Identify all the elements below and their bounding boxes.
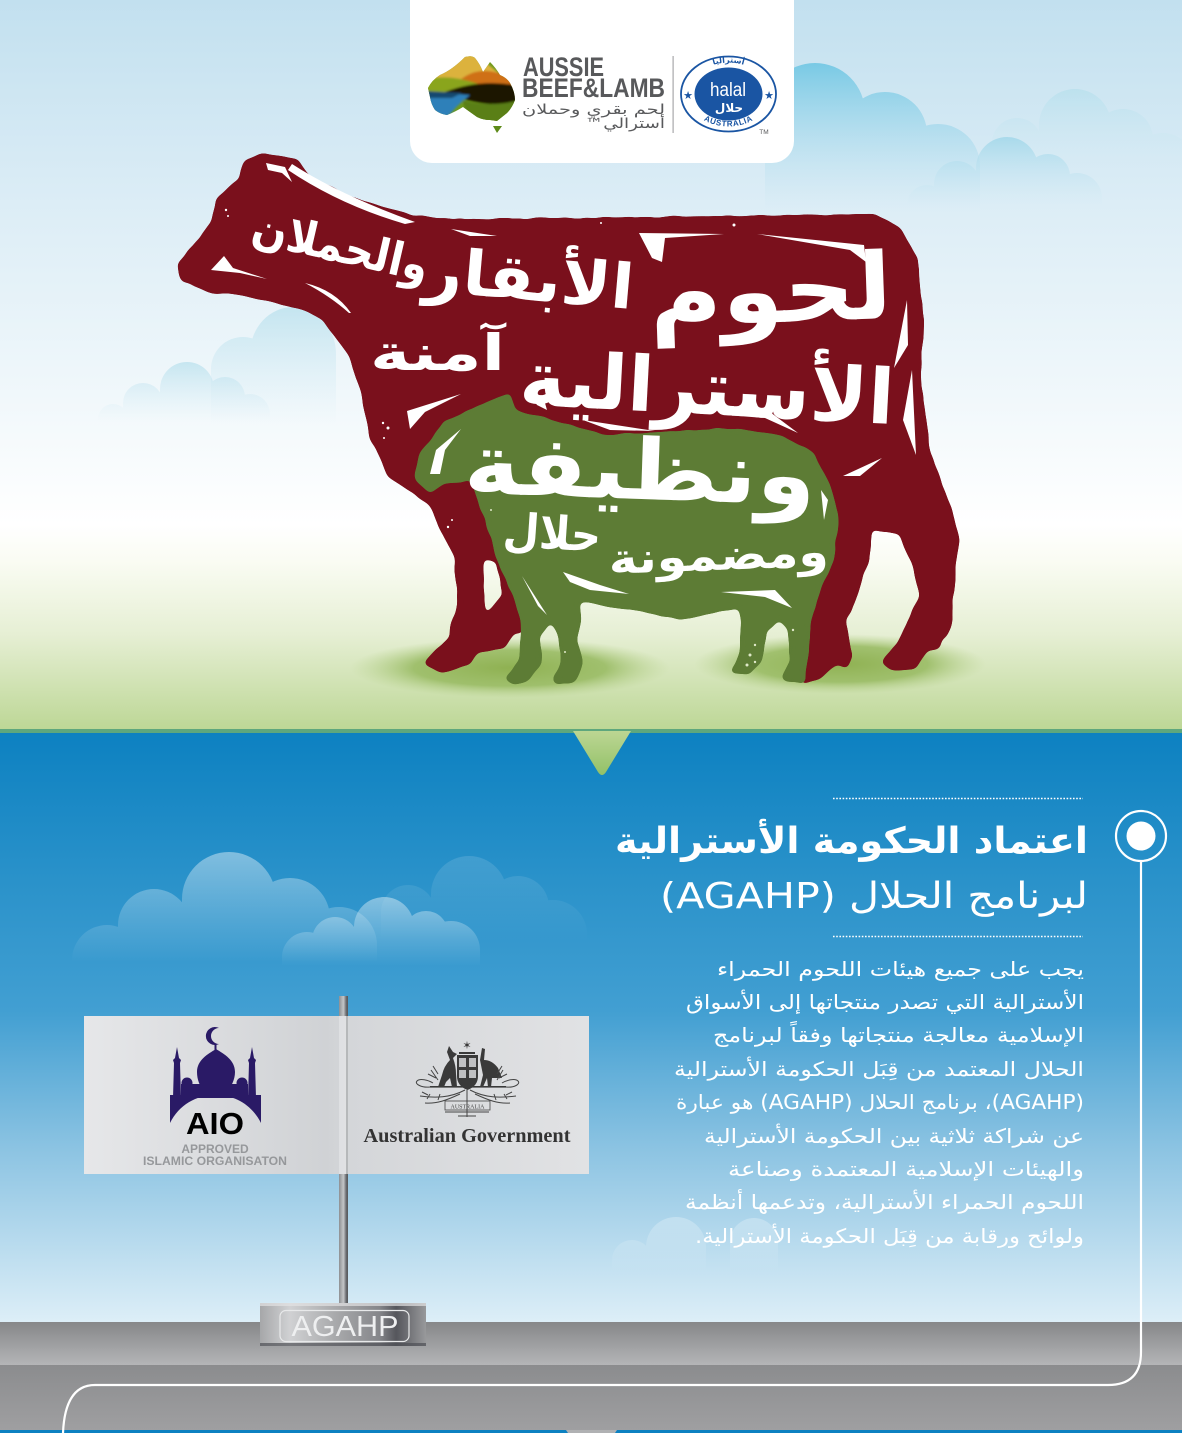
logo: halal Australia seal: ★ [683, 90, 693, 102]
sky and meadow background [0, 0, 1182, 729]
AIO logo: APPROVED [181, 1142, 249, 1156]
pole base with AGAHP plate: AGAHP [292, 1311, 398, 1343]
logo: halal Australia seal: ★ [764, 90, 774, 102]
AIO logo: ISLAMIC ORGANISATON [143, 1154, 287, 1168]
sheep silhouette with headline [415, 394, 838, 684]
flag pole [260, 996, 426, 1346]
blue section background [0, 733, 1182, 1325]
logo: Aussie Beef and Lamb wordmark: لحم بقري وحملان [522, 102, 665, 118]
cloud: lower large [72, 852, 377, 962]
logo panel [410, 0, 794, 163]
body text: الحلال المعتمد من قِبَل الحكومة الأسترالية [674, 1057, 1084, 1081]
body text: الأسترالية التي تصدر منتجاتها إلى الأسواق [686, 990, 1084, 1015]
sheep silhouette with headline: ونظيفة [462, 415, 818, 526]
Australian Government crest [364, 1040, 571, 1147]
cloud: lower small [282, 897, 480, 966]
body text: اللحوم الحمراء الأسترالية، وتدعمها أنظمة [685, 1189, 1084, 1214]
logo: Aussie Beef and Lamb wordmark: AUSSIE [523, 52, 604, 82]
cloud: behind body text [612, 1217, 778, 1272]
sheep silhouette with headline: ومضمونة [608, 527, 829, 585]
sheep silhouette with headline: حلال [501, 502, 603, 563]
cloud: upper right large [765, 63, 978, 182]
logo: halal Australia seal [680, 56, 777, 136]
body text: الإسلامية معالجة منتجاتها وفقاً لبرنامج [713, 1021, 1084, 1047]
grass shadow: rear [694, 634, 986, 694]
logo: halal Australia seal: halal [710, 80, 746, 101]
cloud: far right faint [992, 89, 1182, 168]
cow silhouette with headline: آمنة [370, 322, 508, 382]
section heading: لبرنامج الحلال (AGAHP) [660, 876, 1088, 917]
logo: halal Australia seal: أستراليا [712, 56, 746, 66]
cow silhouette with headline: الأسترالية [518, 332, 897, 443]
body text: (AGAHP)، برنامج الحلال (AGAHP) هو عبارة [676, 1090, 1084, 1114]
logo: halal Australia seal: TM [759, 129, 769, 136]
logo: halal Australia seal: حلال [715, 101, 743, 115]
logo: Aussie Beef and Lamb wordmark [522, 52, 665, 132]
cow silhouette with headline: لحوم [647, 233, 894, 349]
logo: Australia map [428, 56, 515, 133]
flag with logos [84, 1016, 589, 1174]
body text: عن شراكة ثلاثية بين الحكومة الأسترالية [704, 1124, 1084, 1148]
logo: Aussie Beef and Lamb wordmark: BEEF&LAMB [522, 73, 665, 103]
AIO logo [143, 1027, 287, 1168]
cloud: left large [211, 307, 336, 425]
body text: يجب على جميع هيئات اللحوم الحمراء [717, 957, 1084, 981]
cloud: left small [98, 362, 270, 422]
connector timeline [63, 811, 1166, 1433]
section heading: اعتماد الحكومة الأسترالية [615, 818, 1088, 862]
body text: ولوائح ورقابة من قِبَل الحكومة الأسترالية. [695, 1224, 1084, 1248]
Australian Government crest: ✶ [462, 1040, 472, 1052]
logo: halal Australia seal: AUSTRALIA [704, 116, 752, 126]
AIO logo: AIO [186, 1106, 244, 1141]
section heading [615, 798, 1088, 936]
road [0, 1322, 1182, 1433]
cloud: lower faint [381, 856, 587, 942]
grass shadow: front [350, 638, 670, 698]
Australian Government crest: Australian Government [364, 1125, 571, 1147]
pole base with AGAHP plate [260, 1303, 426, 1346]
cloud: upper right small [907, 137, 1102, 208]
logo: Aussie Beef and Lamb wordmark: أسترالي™ [585, 114, 665, 132]
pointer triangle [573, 731, 631, 775]
cow silhouette with headline: الأبقار [418, 232, 637, 324]
cow silhouette with headline [178, 154, 958, 682]
Australian Government crest: AUSTRALIA [450, 1104, 485, 1110]
cow silhouette with headline: والحملان [247, 200, 435, 293]
body text: والهيئات الإسلامية المعتمدة وصناعة [728, 1157, 1084, 1181]
body text [674, 957, 1084, 1248]
